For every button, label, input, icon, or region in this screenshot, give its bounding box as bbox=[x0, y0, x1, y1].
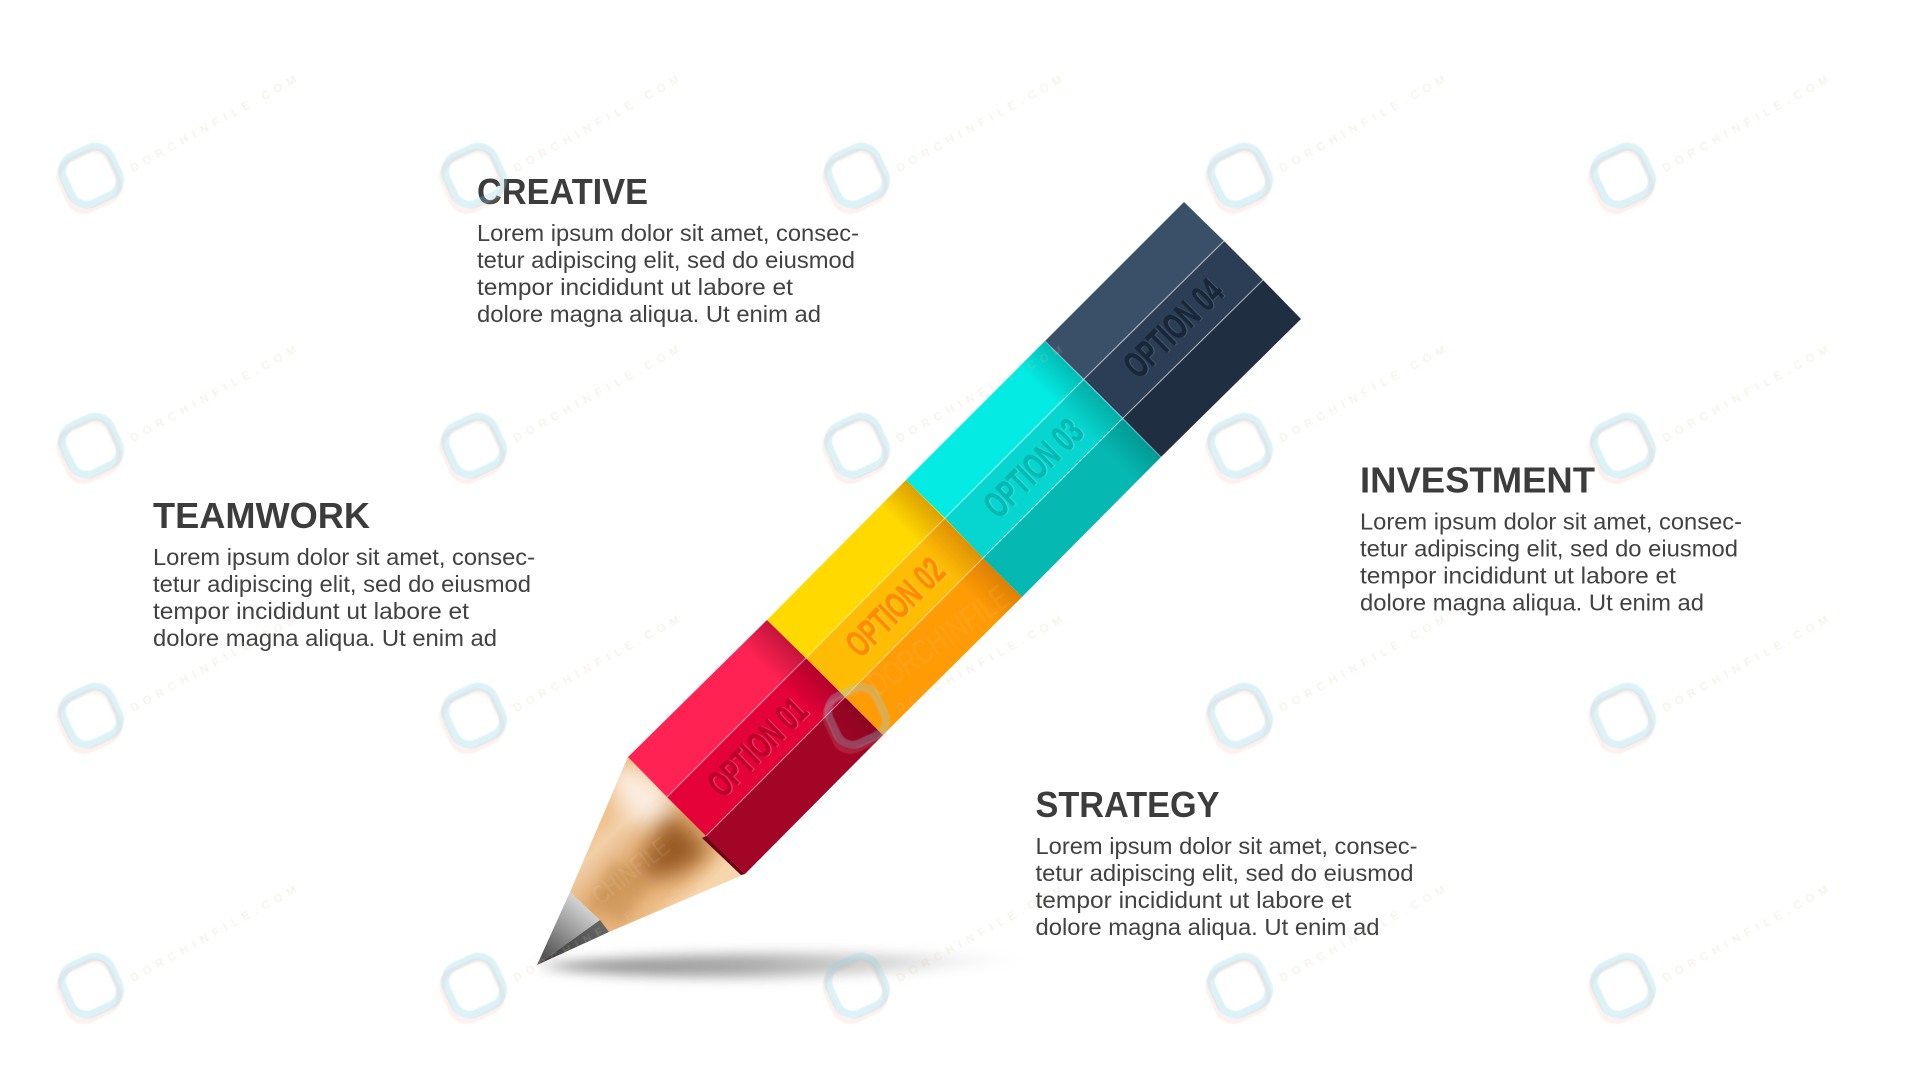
label: option 01: OPTION 01 bbox=[700, 690, 815, 805]
segment: option 01 bbox=[628, 620, 883, 875]
pencil bbox=[537, 202, 1301, 965]
body: creative: dolore magna aliqua. Ut enim ad bbox=[477, 301, 821, 327]
body: investment bbox=[1360, 508, 1742, 616]
body: strategy: Lorem ipsum dolor sit amet, consec- bbox=[1036, 833, 1418, 859]
body: strategy: dolore magna aliqua. Ut enim ad bbox=[1036, 914, 1380, 940]
watermark pattern: DORCHINFILE.COM bbox=[512, 74, 681, 175]
watermark pattern: DORCHINFILE.COM bbox=[129, 884, 298, 985]
watermark pattern: DORCHINFILE.COM bbox=[895, 614, 1064, 715]
heading: investment: INVESTMENT bbox=[1360, 460, 1595, 500]
body: teamwork: tempor incididunt ut labore et bbox=[153, 598, 469, 624]
text block: creative bbox=[477, 171, 859, 327]
watermark pattern: DORCHINFILE.COM bbox=[129, 344, 298, 445]
watermark pattern: DORCHINFILE.COM bbox=[895, 74, 1064, 175]
body: teamwork bbox=[153, 544, 535, 651]
watermark pattern: DORCHINFILE.COM bbox=[1661, 884, 1830, 985]
body: teamwork: Lorem ipsum dolor sit amet, consec- bbox=[153, 544, 535, 570]
body: creative: tempor incididunt ut labore et bbox=[477, 274, 793, 300]
watermark pattern: DORCHINFILE.COM bbox=[1278, 344, 1447, 445]
watermark pattern: DORCHINFILE.COM bbox=[1661, 74, 1830, 175]
watermark pattern: DORCHINFILE.COM bbox=[512, 344, 681, 445]
text block: teamwork bbox=[153, 495, 535, 651]
watermark pattern: CHINFILE bbox=[586, 831, 675, 910]
body: creative bbox=[477, 220, 859, 327]
watermark pattern: DORCHINFILE bbox=[860, 578, 1017, 704]
watermark pattern: DORCHINFILE.COM bbox=[512, 614, 681, 715]
watermark pattern: DORCHINFILE.COM bbox=[1661, 344, 1830, 445]
body: strategy: tetur adipiscing elit, sed do eiusmod bbox=[1036, 860, 1414, 886]
heading: strategy: STRATEGY bbox=[1036, 784, 1220, 825]
label: option 03: OPTION 03 bbox=[976, 411, 1091, 526]
watermark pattern: DORCHINFILE.COM bbox=[1278, 74, 1447, 175]
body: creative: Lorem ipsum dolor sit amet, consec- bbox=[477, 220, 859, 246]
watermark pattern: DORCHINFILE.COM bbox=[1661, 614, 1830, 715]
body: creative: tetur adipiscing elit, sed do eiusmod bbox=[477, 247, 855, 273]
watermark pattern: DORCHINFILE.COM bbox=[1278, 884, 1447, 985]
wooden cone bbox=[570, 753, 745, 932]
watermark pattern: DORCHINFILE.COM bbox=[895, 344, 1064, 445]
body: investment: Lorem ipsum dolor sit amet, consec- bbox=[1360, 508, 1742, 534]
body: strategy bbox=[1036, 833, 1418, 940]
body: strategy: tempor incididunt ut labore et bbox=[1036, 887, 1352, 913]
text block: strategy bbox=[1036, 784, 1418, 940]
text block: investment bbox=[1360, 460, 1742, 616]
label: option 02: OPTION 02 bbox=[838, 550, 953, 665]
body: investment: dolore magna aliqua. Ut enim ad bbox=[1360, 590, 1704, 616]
label: option 04: OPTION 04 bbox=[1116, 271, 1231, 386]
watermark pattern: DORCHINFILE.COM bbox=[512, 884, 681, 985]
watermark pattern: DORCHINFILE.COM bbox=[129, 74, 298, 175]
body: investment: tetur adipiscing elit, sed do eiusmod bbox=[1360, 536, 1738, 562]
watermark pattern: DORCHINFILE.COM bbox=[1278, 614, 1447, 715]
segment: option 03 bbox=[906, 341, 1161, 597]
watermark pattern: DORCHINFILE.COM bbox=[129, 614, 298, 715]
body: teamwork: dolore magna aliqua. Ut enim ad bbox=[153, 625, 497, 651]
heading: creative: CREATIVE bbox=[477, 171, 648, 212]
graphite tip bbox=[537, 892, 609, 965]
heading: teamwork: TEAMWORK bbox=[153, 495, 370, 536]
segment: option 02 bbox=[767, 480, 1022, 735]
body: teamwork: tetur adipiscing elit, sed do eiusmod bbox=[153, 571, 531, 597]
watermark pattern: DORCHINFILE.COM bbox=[895, 884, 1064, 985]
body: investment: tempor incididunt ut labore et bbox=[1360, 562, 1676, 588]
pencil shadow bbox=[537, 954, 1060, 977]
segment: option 04 bbox=[1045, 202, 1301, 457]
